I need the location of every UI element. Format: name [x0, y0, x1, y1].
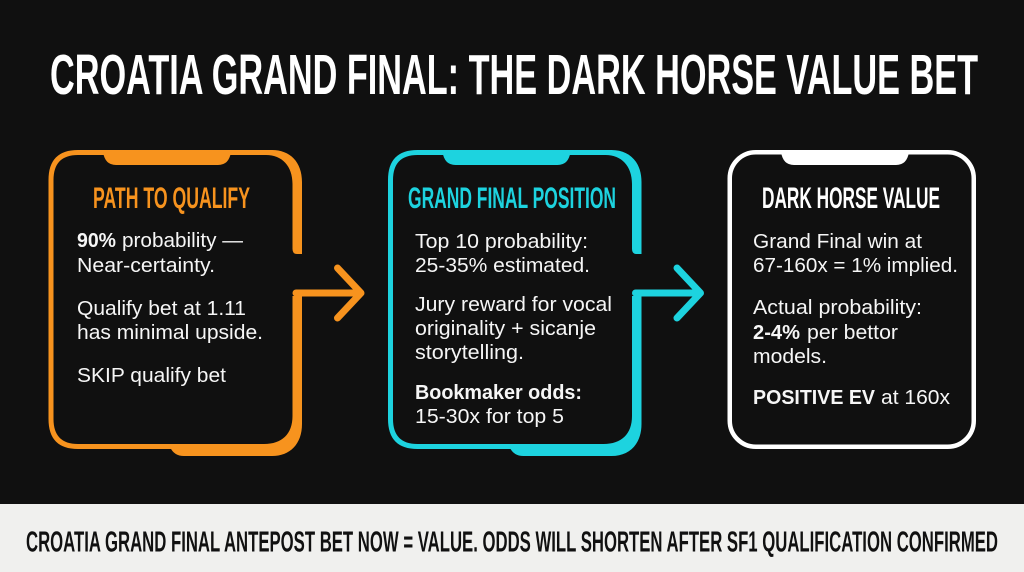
footer band: [0, 504, 1024, 572]
text: top 10 probability: [415, 230, 590, 277]
arrow: cyan: [636, 268, 700, 318]
text: actual probability: Actual probability:: [753, 296, 922, 319]
text: jury reward: Jury reward for vocal: [415, 293, 612, 316]
frame: cyan: [388, 150, 642, 456]
text: probability: probability —: [122, 229, 244, 252]
text: jury reward: [415, 293, 612, 364]
text: positive ev: [753, 386, 951, 409]
text: jury reward: originality + sicanje: [415, 317, 596, 340]
text: top 10 probability: Top 10 probability:: [415, 230, 588, 253]
text: implied: Grand Final win at: [753, 230, 922, 253]
text: actual probability: models.: [753, 345, 827, 368]
text: probability: Near-certainty.: [77, 254, 215, 277]
panel: path to qualify: [48, 150, 361, 456]
arrow: orange: [296, 268, 361, 318]
text: probability: [77, 229, 244, 277]
heading: path to qualify: PATH TO QUALIFY: [93, 182, 250, 215]
heading: grand final position: GRAND FINAL POSITION: [408, 182, 616, 215]
frame: white: [730, 152, 974, 447]
panel: dark horse value: [730, 152, 974, 447]
panel: grand final position: [388, 150, 700, 456]
frame: orange: [48, 150, 302, 456]
text: implied: 67-160x = 1% implied.: [753, 254, 958, 277]
text: bookmaker odds: Bookmaker odds:: [415, 381, 582, 404]
text: jury reward: storytelling.: [415, 341, 524, 364]
text: actual probability: per bettor: [807, 321, 898, 344]
text: qualify bet: Qualify bet at 1.11: [77, 297, 246, 320]
text: qualify bet: [77, 297, 263, 344]
text: actual probability: [753, 296, 922, 368]
text: top 10 probability: 25-35% estimated.: [415, 254, 590, 277]
text: bookmaker odds: 15-30x for top 5: [415, 405, 564, 428]
text: positive ev: POSITIVE EV: [753, 386, 875, 409]
text: skip: SKIP qualify bet: [77, 364, 226, 387]
text: implied: [753, 230, 958, 277]
text: actual probability: 2-4%: [753, 321, 800, 344]
text: positive ev: at 160x: [881, 386, 951, 409]
text: qualify bet: has minimal upside.: [77, 321, 263, 344]
text: probability: 90%: [77, 229, 116, 252]
text: bookmaker odds: [415, 381, 582, 428]
